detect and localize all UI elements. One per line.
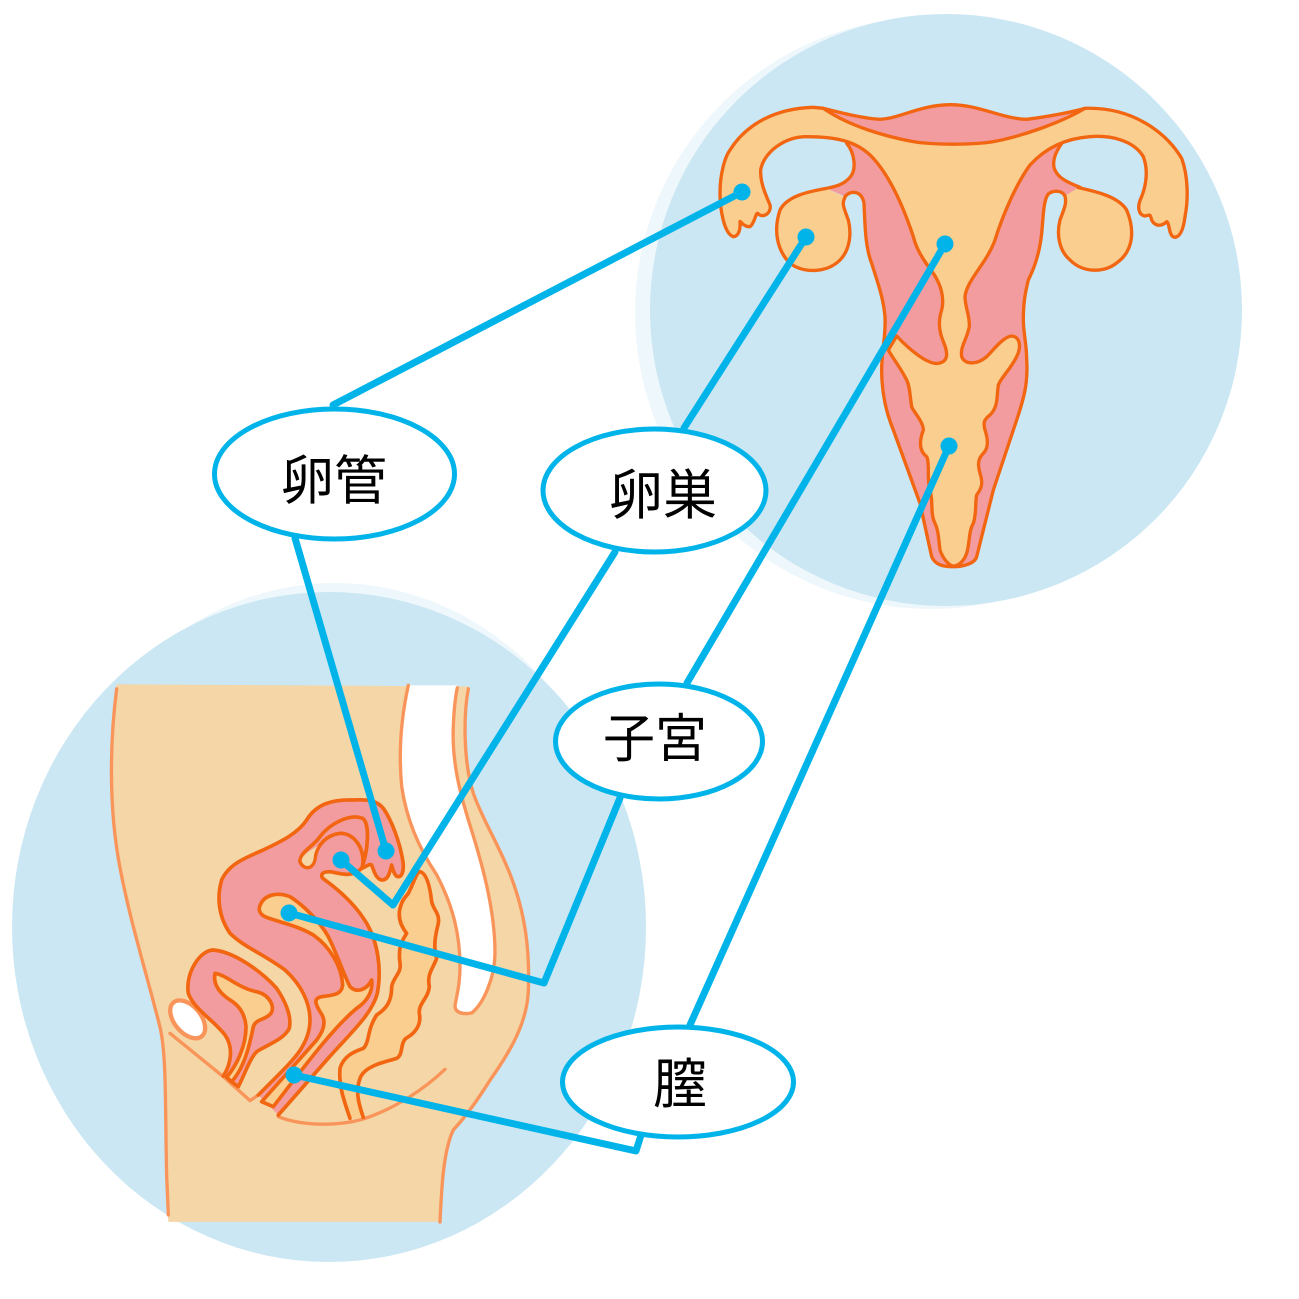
- left ovary: [777, 188, 850, 270]
- label: fallopian tube: 卵管: [281, 452, 387, 511]
- connector lines: [289, 192, 949, 1151]
- label: fallopian tube: [214, 409, 454, 539]
- tube tip: [302, 846, 318, 866]
- uterus and fallopian tube: [219, 800, 403, 1115]
- right ovary: [1058, 188, 1132, 270]
- right ovary outline: [1058, 188, 1132, 270]
- illustration: side view body silhouette: [111, 684, 529, 1222]
- panel: front view background circle: [635, 14, 1242, 609]
- illustration: side view pelvic organs: [163, 800, 445, 1124]
- vagina connectors: [294, 446, 949, 1151]
- pelvic floor and pubic bone: [163, 994, 445, 1124]
- panel: side view background circle: [12, 583, 646, 1262]
- uterine wall outline: [823, 105, 1085, 567]
- label: vagina: [562, 1027, 794, 1137]
- uterine wall: [823, 105, 1085, 567]
- label: ovary: 卵巣: [609, 466, 717, 526]
- label: uterus: 子宮: [603, 711, 707, 769]
- left ovary outline: [777, 188, 850, 270]
- bladder: [188, 950, 290, 1087]
- uterine cavity and vagina: [259, 894, 372, 1107]
- fallopian tube connectors: [295, 192, 742, 851]
- fallopian tubes, uterine cavity and vagina lumen: [720, 107, 1187, 566]
- label: vagina: 膣: [653, 1055, 707, 1115]
- ovary connectors: [341, 237, 806, 905]
- white abdominal space: [400, 685, 495, 1014]
- label: ovary: [543, 429, 766, 552]
- bladder lumen: [215, 973, 272, 1082]
- label: uterus: [556, 684, 762, 799]
- body contour lines: [111, 685, 529, 1222]
- connector end dots: [280, 184, 958, 1084]
- ovary ligament loop: [300, 817, 367, 868]
- illustration: front view of uterus, tubes and ovaries: [720, 105, 1187, 567]
- rectum: [340, 872, 439, 1118]
- uterus connectors: [289, 244, 945, 983]
- body fill: [111, 684, 529, 1222]
- rectum outline: [340, 872, 439, 1118]
